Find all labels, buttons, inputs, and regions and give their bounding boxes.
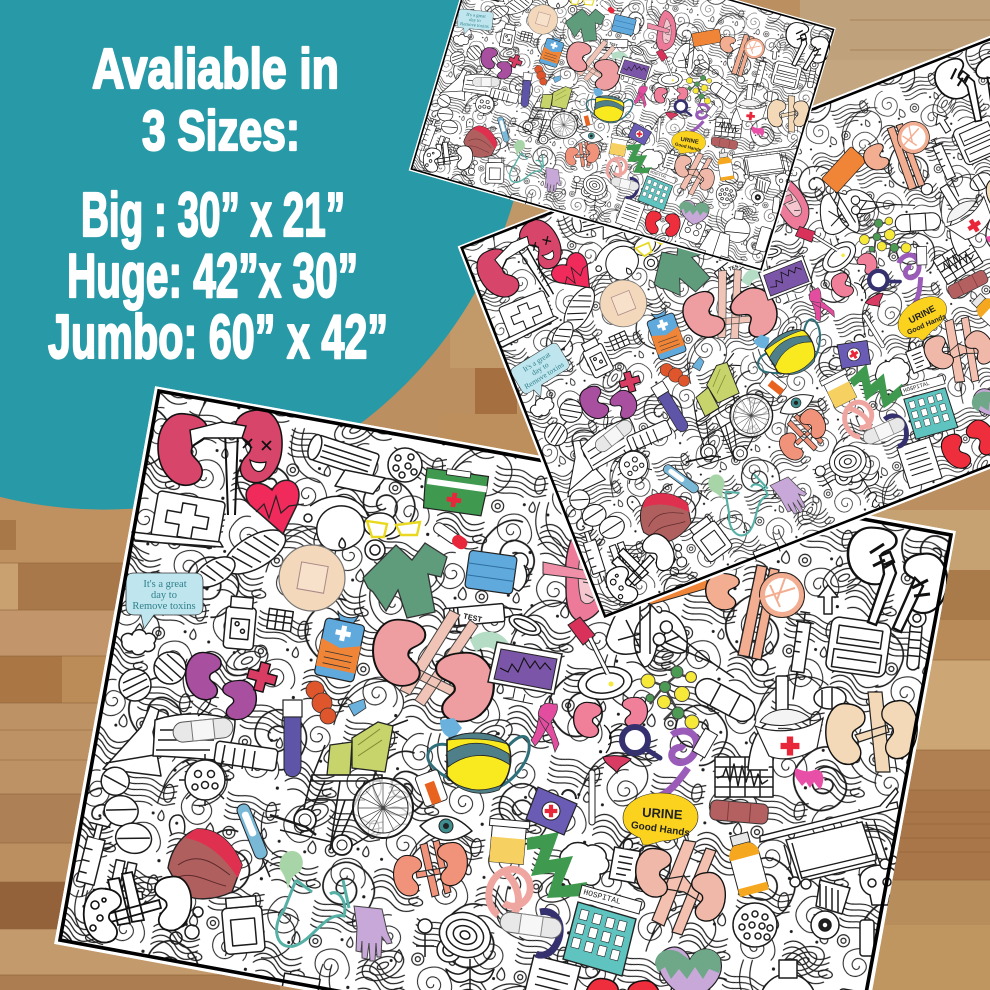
icon: purple medical bag	[526, 787, 577, 835]
icon: heart with pulse	[246, 480, 304, 534]
icon: hospital building: HOSPITAL	[582, 888, 622, 907]
icon: purple test tube	[283, 700, 302, 777]
icon: pink kidney cross-section	[543, 530, 607, 622]
icon: striped mask	[428, 733, 529, 793]
icon: gurney	[760, 788, 898, 889]
speech bubble: toxins: It's a great	[143, 579, 187, 590]
icon: orange dumbbell	[306, 681, 336, 724]
icon: blue thermometer	[235, 802, 276, 879]
heading line one: Avaliable in	[92, 37, 339, 101]
icon: pill red	[432, 520, 470, 552]
icon: purple glove	[354, 906, 392, 961]
icon: large pink kidneys with arteries	[373, 610, 510, 738]
icon: brown bandage	[709, 800, 769, 824]
icon: beige kidneys	[826, 692, 917, 772]
teal circle panel	[0, 0, 530, 510]
icon: orange mask	[633, 557, 717, 607]
size huge: Huge: 42”x 30”	[67, 242, 358, 311]
icon: white outlined kidneys	[84, 872, 191, 943]
poster black frame	[60, 391, 951, 990]
icon: eye	[439, 819, 453, 833]
icon: teal stethoscope	[277, 880, 349, 946]
icon: pink kidneys with magnifier	[574, 697, 660, 773]
icon: green and purple heart	[655, 947, 721, 990]
heading line two: 3 Sizes:	[142, 99, 300, 163]
speech bubble: urine good hands: Good Hands	[630, 820, 691, 839]
icon: thin thermometer	[589, 770, 595, 825]
icon: green drop	[280, 851, 303, 889]
speech bubble: toxins: day to	[151, 590, 177, 601]
icon: peach kidney with artery	[706, 565, 804, 660]
poster: small (back top)	[401, 0, 843, 279]
speech bubble: urine good hands: URINE	[642, 805, 683, 822]
icon: purple swirl	[646, 728, 718, 800]
icon: nurse hat	[755, 709, 823, 759]
icon: medicine pouch	[314, 609, 367, 682]
size jumbo: Jumbo: 60” x 42”	[48, 303, 388, 372]
icon: salmon kidneys	[394, 840, 467, 897]
icon: red kidneys	[585, 978, 661, 990]
icon: pale pink kidneys with arteries	[636, 840, 725, 935]
poster: big (front)	[54, 386, 956, 990]
speech bubble: toxins	[126, 573, 203, 629]
icon: green zigzag	[527, 832, 587, 898]
icon: patient monitor	[488, 642, 562, 704]
icon: orange bottle	[724, 830, 769, 897]
poster: middle	[396, 0, 990, 713]
icon: pink ribbon	[531, 703, 559, 752]
icon: red scalpel	[568, 617, 614, 686]
icon: pink heart splash	[795, 768, 823, 790]
icon: pink pretzel	[489, 869, 530, 915]
icon: wheelchair	[270, 720, 413, 855]
icon: blue face mask	[465, 550, 517, 594]
icon: blue tag	[348, 699, 366, 716]
speech bubble: toxins: Remove toxins	[132, 601, 196, 612]
doodle outline icons	[71, 433, 927, 990]
icon: orange inhaler	[415, 769, 448, 807]
icon: molecule	[641, 666, 699, 729]
speech bubble: urine good hands	[623, 793, 698, 845]
icon: purple kidneys with plus	[186, 652, 280, 721]
icon: black outlined kidneys	[848, 528, 947, 632]
icon: red surgical mask	[168, 815, 268, 899]
icon: crimson kidneys with face	[158, 410, 282, 515]
icon: urine cup	[486, 818, 530, 865]
size big: Big : 30” x 21”	[81, 181, 345, 250]
title: available sizes	[48, 37, 388, 372]
icon: green first aid kit	[422, 466, 489, 516]
icon: hospital building	[563, 885, 642, 976]
icon: round bandage	[279, 545, 345, 611]
icon: bandage with navy loop	[499, 911, 563, 955]
icon: yellow glasses	[367, 521, 420, 537]
icon: green scrub coat	[363, 543, 447, 618]
icon: grey bandage	[172, 717, 234, 743]
text: test tube label: TEST	[462, 612, 483, 625]
